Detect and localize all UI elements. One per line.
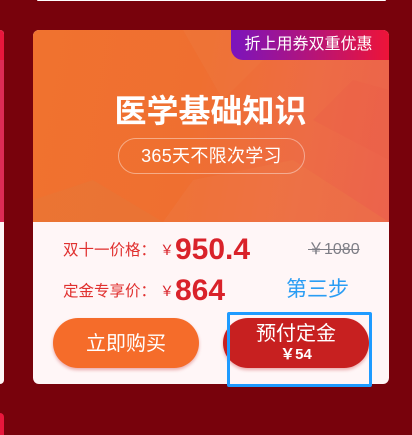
duration pill: 365天不限次学习 [141,146,282,166]
step label: 第三步 [286,278,349,301]
price value: 864 [175,274,225,307]
original price: ￥1080 [308,241,360,258]
label: 双十一价格： [63,242,156,259]
course title: 医学基础知识 [114,93,306,129]
price row: deposit [63,274,349,307]
buy now button [53,318,199,368]
price row: double eleven [63,233,360,266]
label: 定金专享价： [63,283,156,300]
blue highlight box [227,312,372,387]
header facets [33,30,389,222]
buy now button: 立即购买 [86,333,166,355]
left neighbouring card [0,30,4,384]
price currency: ￥ [160,283,174,299]
orange header panel [33,30,389,222]
price value: 950.4 [175,233,250,266]
deposit button label: 预付定金 [256,323,336,345]
deposit amount: ￥54 [280,346,312,363]
main product card [33,30,389,384]
deposit button [223,318,369,368]
discount tag: 折上用券双重优惠 [244,36,372,53]
duration pill [118,138,305,174]
price currency: ￥ [160,242,174,258]
lower neighbouring card [0,413,4,435]
discount tag [231,30,389,60]
top card remnant [37,0,386,1]
